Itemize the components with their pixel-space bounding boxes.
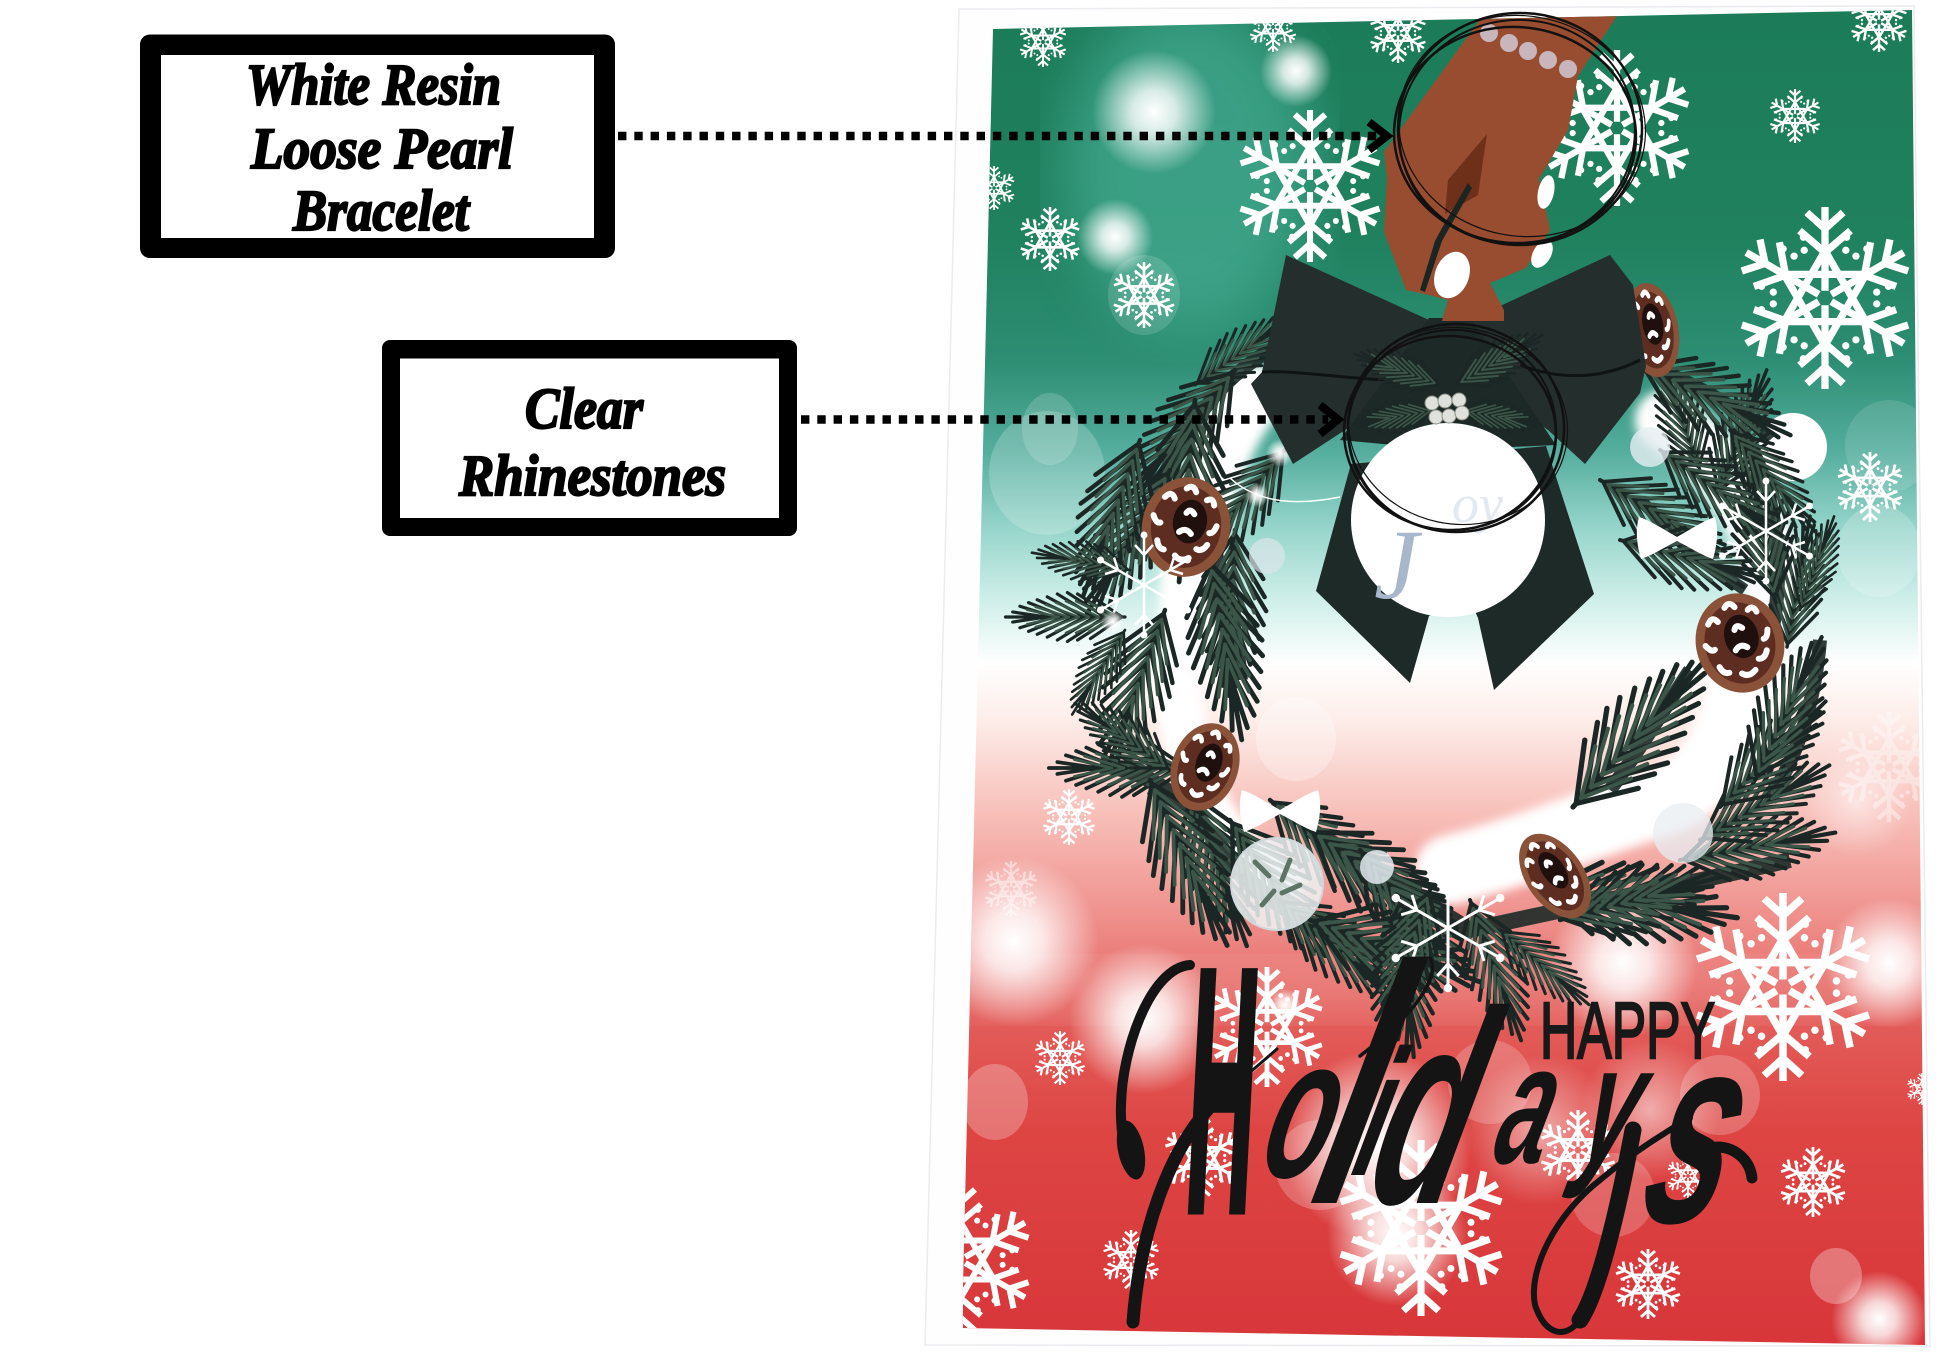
small white bows [1240, 517, 1717, 832]
ornament script: oy [1452, 474, 1503, 534]
nails [1434, 175, 1555, 298]
Holidays lettering [1116, 956, 1758, 1335]
wreath dark core [1100, 345, 1820, 970]
filigree snowflakes [1097, 478, 1813, 992]
bow tails [1316, 446, 1594, 690]
dotted arrow to rhinestones [801, 405, 1338, 434]
pine cones [1134, 279, 1795, 931]
scribbled highlight circle: bracelet [1378, 0, 1666, 259]
lettering olidays: i [1339, 1012, 1422, 1214]
callout box: Clear Rhinestones [382, 340, 797, 536]
dotted arrow to bracelet [618, 122, 1387, 150]
callout label text [246, 52, 514, 243]
hand [1384, 16, 1617, 321]
ornament script: J [1374, 509, 1423, 620]
lettering olidays: o [1244, 997, 1371, 1220]
callout label text: Bracelet [292, 178, 471, 243]
pine branches [1005, 299, 1853, 1060]
hand with pearl bracelet [1384, 16, 1617, 321]
pearl bracelet [1480, 24, 1577, 78]
lettering H: H [1179, 898, 1267, 1284]
snowflakes [962, 10, 1923, 1328]
lettering flourishes [1112, 958, 1752, 1332]
greeting card paper [925, 6, 1930, 1346]
callout box: White Resin Loose Pearl Bracelet [140, 34, 615, 258]
callout label text: Loose Pearl [250, 116, 514, 181]
central black bow with ornament [1251, 255, 1646, 690]
greeting card artwork [962, 10, 1925, 1345]
callout label text: White Resin [246, 52, 501, 117]
HAPPY lettering: HAPPY [1540, 986, 1715, 1075]
rhinestones [1425, 393, 1469, 424]
callout label text: Clear [525, 376, 643, 441]
callout label text: Rhinestones [458, 443, 726, 508]
bow knot with needles [1340, 318, 1556, 450]
hand shading [1445, 134, 1487, 214]
scribbled highlight circle: rhinestones [1330, 307, 1586, 545]
bow wings [1251, 255, 1428, 464]
lettering olidays: l [1288, 895, 1446, 1275]
lettering olidays: y [1561, 1009, 1672, 1199]
ornament white ball [1351, 423, 1545, 617]
wreath snow [1178, 395, 1775, 880]
lettering olidays: s [1619, 978, 1783, 1280]
lettering olidays: d [1346, 956, 1524, 1262]
wreath [1005, 279, 1853, 1060]
callout label text [458, 376, 726, 508]
card gradient background [950, 0, 1940, 1362]
glass ornaments and silver balls [1231, 427, 1713, 930]
light glints [1101, 439, 1340, 1021]
glows and bokeh [929, 0, 1946, 1362]
lettering olidays: a [1480, 1009, 1583, 1199]
